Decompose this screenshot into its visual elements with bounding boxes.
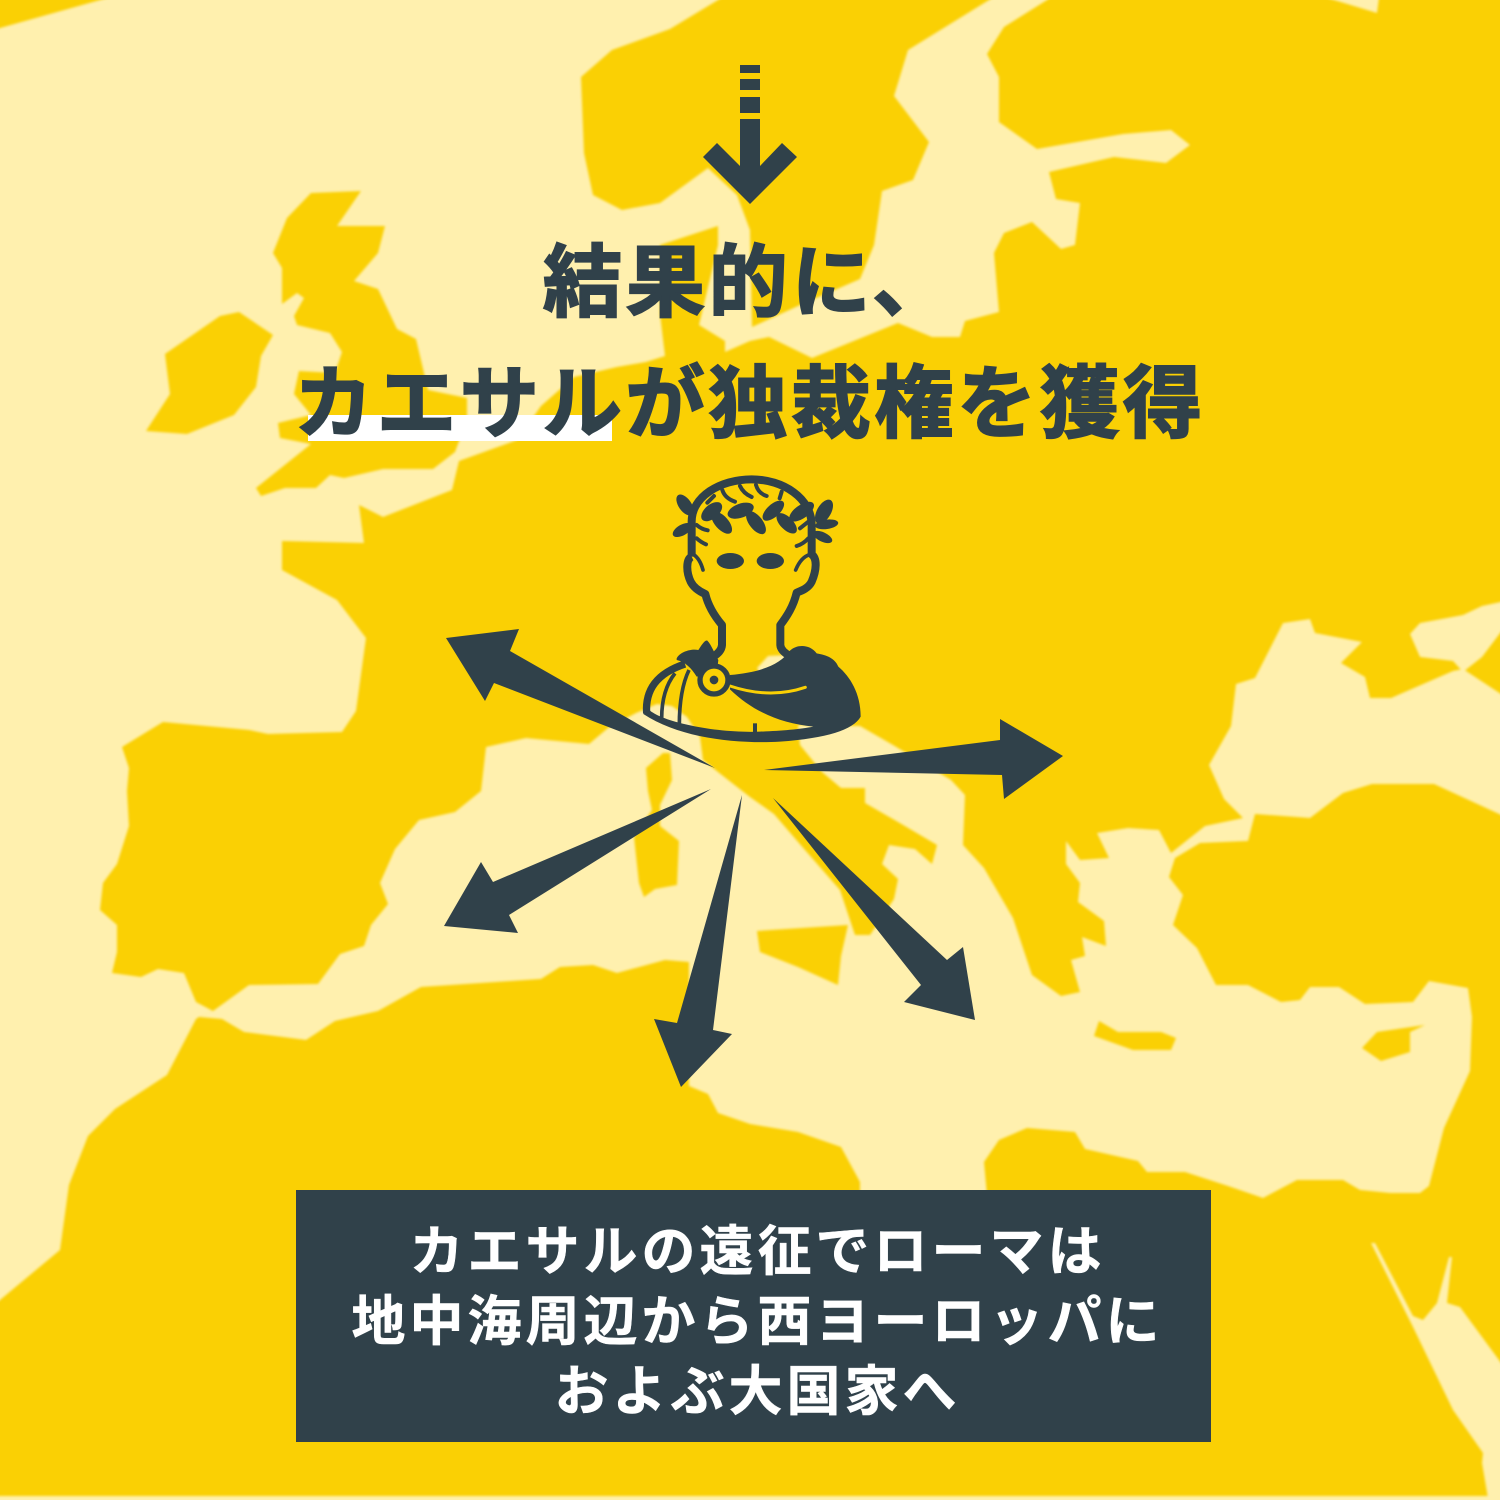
arrow: south — [654, 795, 742, 1087]
map: top-right sliver of sea — [1300, 0, 1380, 13]
heading underline highlight — [308, 415, 612, 441]
box text line 2: 地中海周辺から西ヨーロッパに — [352, 1292, 1164, 1352]
map: Great Britain — [256, 191, 467, 496]
arrow: east — [764, 719, 1063, 799]
heading line 2: カエサルが独裁権を獲得 — [294, 359, 1206, 448]
map: Scandinavia — [581, 0, 1005, 327]
box text line 3: およぶ大国家へ — [554, 1362, 960, 1422]
box text line 1: カエサルの遠征でローマは — [410, 1222, 1106, 1282]
icon: Caesar bust with laurel wreath — [643, 479, 861, 742]
map: Ireland — [146, 312, 273, 434]
bust: laurel wreath leaves — [670, 492, 839, 546]
map: Cyprus — [1362, 1025, 1425, 1061]
bust: head outline — [687, 479, 816, 657]
map: Mediterranean and Black Sea — [199, 619, 1500, 1198]
map: bottom light strip — [0, 1496, 1500, 1500]
map: Atlantic, North Sea and Baltic — [0, 0, 1190, 1308]
map: Red Sea — [1371, 1243, 1500, 1500]
map: Crete — [1094, 1021, 1176, 1050]
heading line 1: 結果的に、 — [543, 238, 955, 327]
map: Sea of Azov — [1410, 600, 1500, 672]
bust: shoulder knot — [677, 640, 718, 677]
arrow: south-east — [773, 798, 975, 1020]
arrow: north-west — [446, 629, 715, 768]
bust: toga mass and hem — [643, 646, 861, 742]
panel: conclusion box — [296, 1190, 1211, 1442]
map: Sicily — [757, 925, 848, 985]
map: sea glimpse behind bust neck — [757, 655, 787, 674]
bust: hair curls — [697, 485, 808, 546]
bust: toga fold highlight — [730, 686, 805, 693]
bust: left shoulder and folds — [647, 664, 685, 713]
map: Corsica and Sardinia — [634, 753, 679, 897]
arrow: south-west — [444, 789, 711, 933]
bust: ear lines — [693, 554, 810, 570]
bust: hem tick — [753, 723, 757, 733]
map: Iceland corner — [0, 0, 135, 31]
bust: eyes — [717, 553, 784, 569]
bust: brooch — [700, 666, 728, 694]
